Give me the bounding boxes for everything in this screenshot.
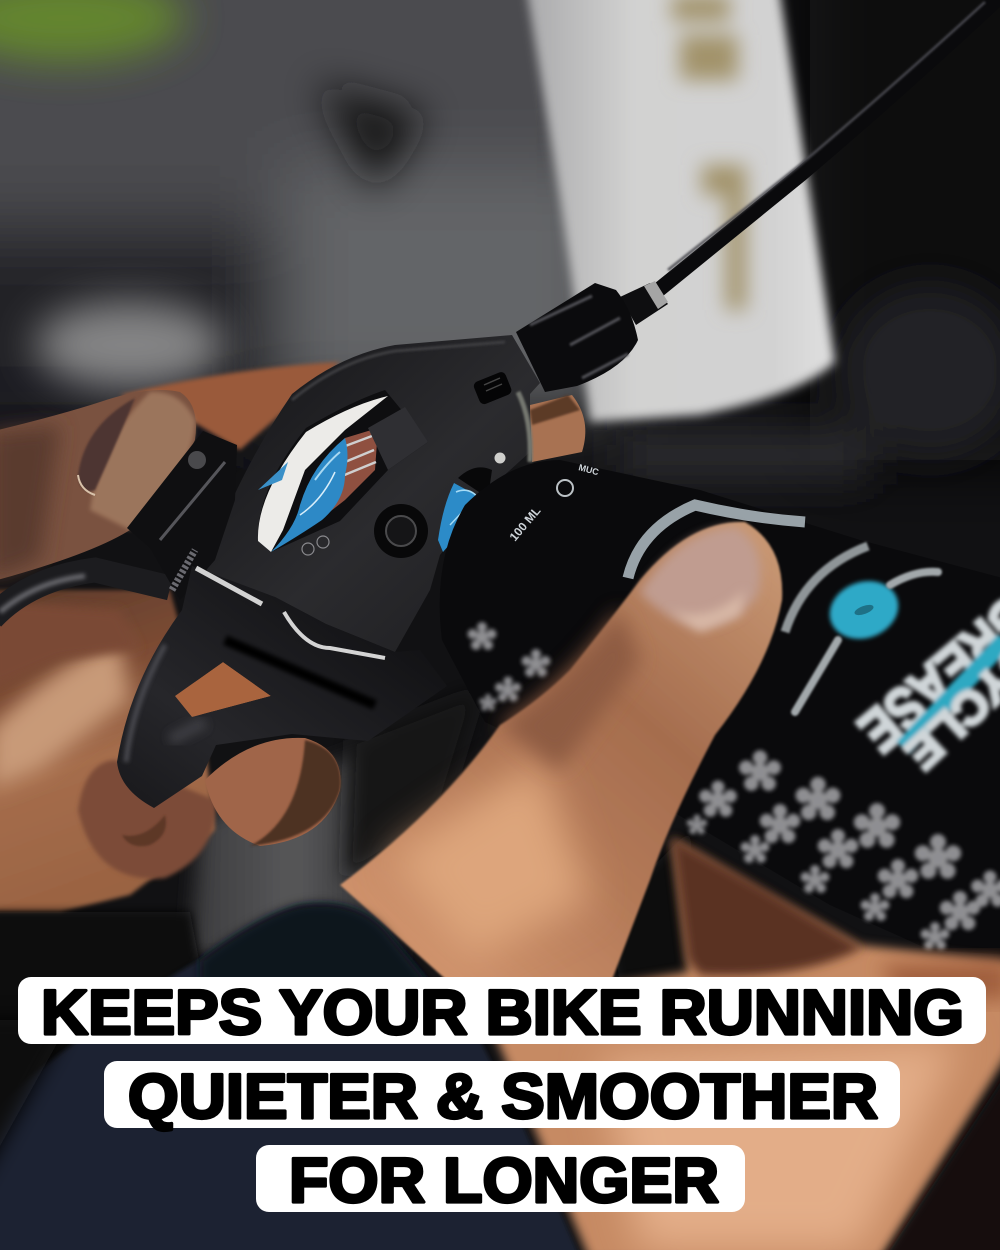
chrome lever edges xyxy=(196,568,262,604)
vent slot xyxy=(472,371,513,406)
lever assembly xyxy=(117,566,447,808)
embossed marks xyxy=(302,536,329,555)
right hand with thumb on bottle xyxy=(340,522,1000,1250)
bottle label circle xyxy=(557,480,573,496)
caption line 1: KEEPS YOUR BIKE RUNNING xyxy=(41,978,964,1048)
back of hand behind shifter xyxy=(120,362,340,450)
caption line 2: QUIETER & SMOOTHER xyxy=(128,1062,878,1132)
blue grease in gears xyxy=(271,438,348,552)
clamp block xyxy=(127,431,237,600)
green foliage blur xyxy=(0,0,185,62)
fingers and palm below bottle xyxy=(480,838,1000,1250)
lever opening skin xyxy=(175,662,271,717)
grease bottle: MUC xyxy=(577,462,600,477)
barrel adjuster xyxy=(516,283,638,392)
white frame tube with gold lettering xyxy=(525,0,835,422)
snowflake pattern xyxy=(468,622,1000,950)
blue logo dot xyxy=(822,572,906,648)
bolt socket xyxy=(374,504,428,558)
cover plate xyxy=(368,407,428,470)
blurred grey post between the hands xyxy=(190,740,400,960)
lower finger xyxy=(205,738,341,846)
caption line 3: FOR LONGER xyxy=(289,1146,719,1216)
fingertip behind shifter xyxy=(530,395,585,462)
palm behind shifter xyxy=(0,590,215,912)
cable ferrule xyxy=(620,283,668,325)
main body xyxy=(205,335,540,652)
rivets xyxy=(494,452,506,464)
index finger xyxy=(0,390,196,582)
grease bottle xyxy=(440,460,1000,955)
thumb xyxy=(340,522,782,1010)
cable xyxy=(640,0,1000,305)
thumbnail xyxy=(640,527,760,628)
shadow corner at right xyxy=(880,1060,1000,1250)
bottle label text: 100 ML xyxy=(507,504,543,544)
exposed gear window xyxy=(258,390,428,552)
blue grease by bottle nozzle xyxy=(438,483,485,552)
brake hose at left xyxy=(0,570,170,618)
shifter xyxy=(117,0,1000,808)
middle finger xyxy=(78,760,215,879)
left hand xyxy=(0,362,585,912)
dashed label band xyxy=(628,505,805,578)
navy jacket sleeve xyxy=(0,903,582,1250)
